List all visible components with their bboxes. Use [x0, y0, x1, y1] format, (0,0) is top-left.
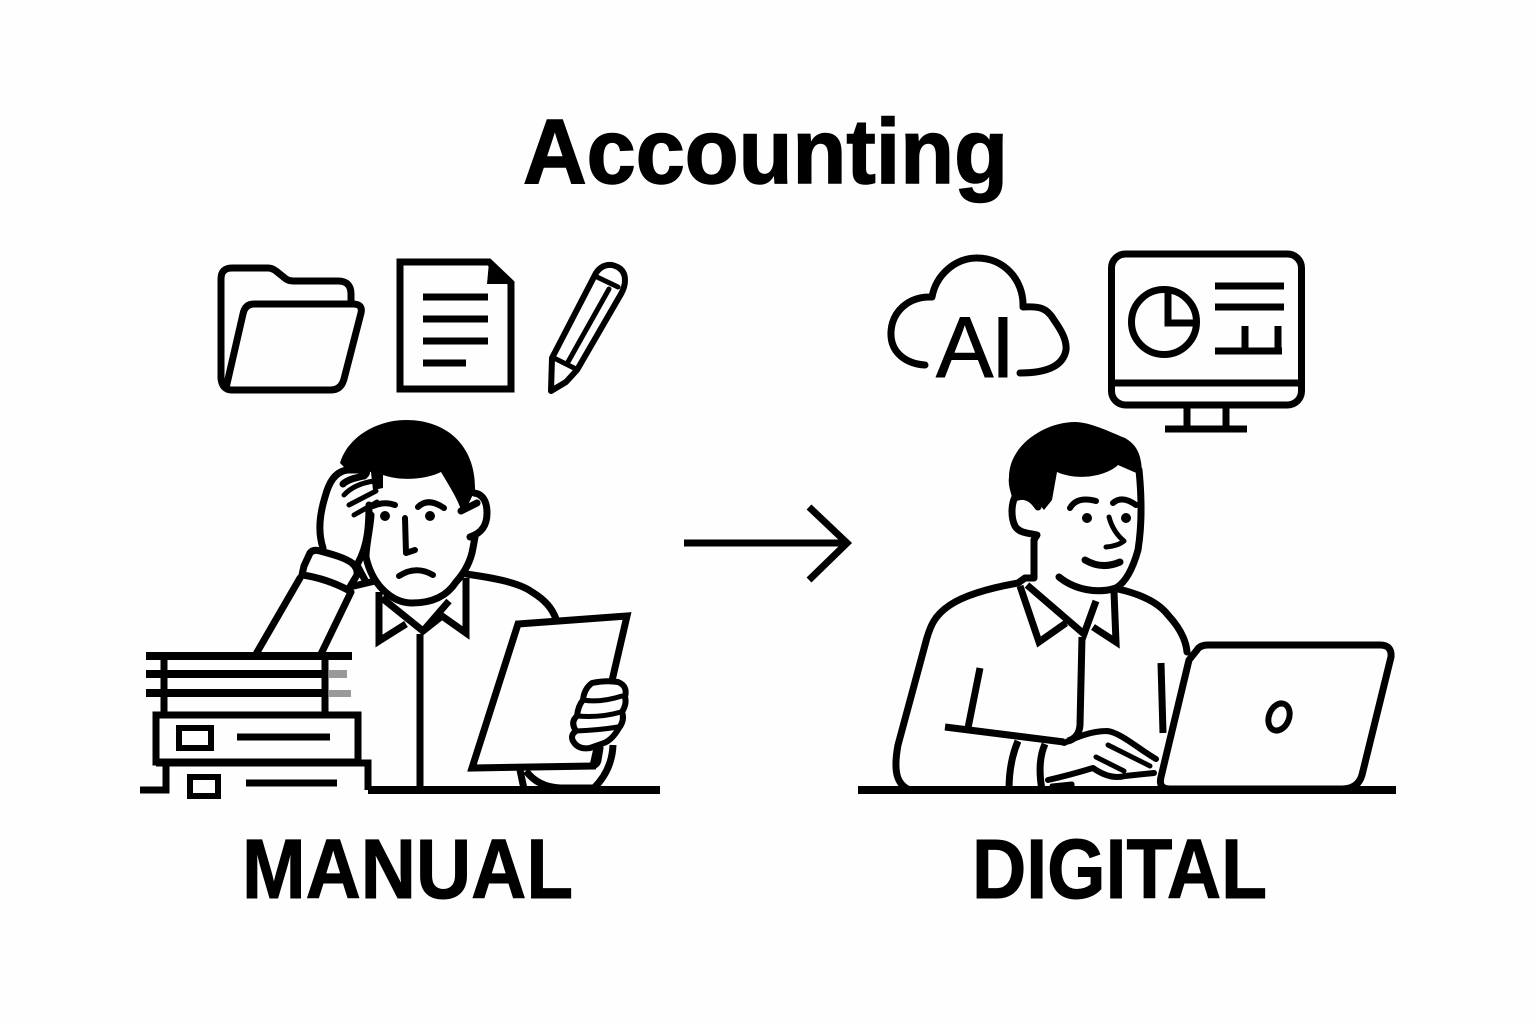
- label manual: MANUAL: [242, 822, 573, 916]
- icon: AI cloud: AI: [936, 300, 1015, 396]
- arrow: [684, 507, 848, 580]
- shirt and torso: [896, 578, 1187, 790]
- hair: [1009, 422, 1142, 510]
- face: [1034, 470, 1141, 591]
- laptop: [1160, 645, 1391, 789]
- icon: folder: [221, 268, 361, 390]
- table digital: [858, 786, 1396, 794]
- ear: [461, 493, 487, 537]
- panel: digital accountant: [858, 422, 1396, 790]
- left hand holding paper: [572, 681, 626, 766]
- paper held in hand: [472, 616, 627, 768]
- panel: manual accountant: [140, 420, 660, 796]
- hair: [340, 420, 475, 510]
- face: [366, 502, 475, 603]
- icon: pencil: [551, 265, 625, 391]
- icon: AI cloud: [891, 258, 1066, 396]
- title: Accounting: [523, 101, 1008, 203]
- ear: [1012, 496, 1038, 535]
- icon: stack of papers and ledgers: [140, 656, 368, 796]
- shirt body: [354, 574, 613, 790]
- icon: monitor dashboard: [1112, 254, 1302, 430]
- table manual: [368, 786, 660, 794]
- label digital: DIGITAL: [972, 822, 1267, 916]
- icon: document: [400, 262, 514, 389]
- hand typing: [1048, 731, 1156, 790]
- raised hand and arm: [256, 470, 377, 654]
